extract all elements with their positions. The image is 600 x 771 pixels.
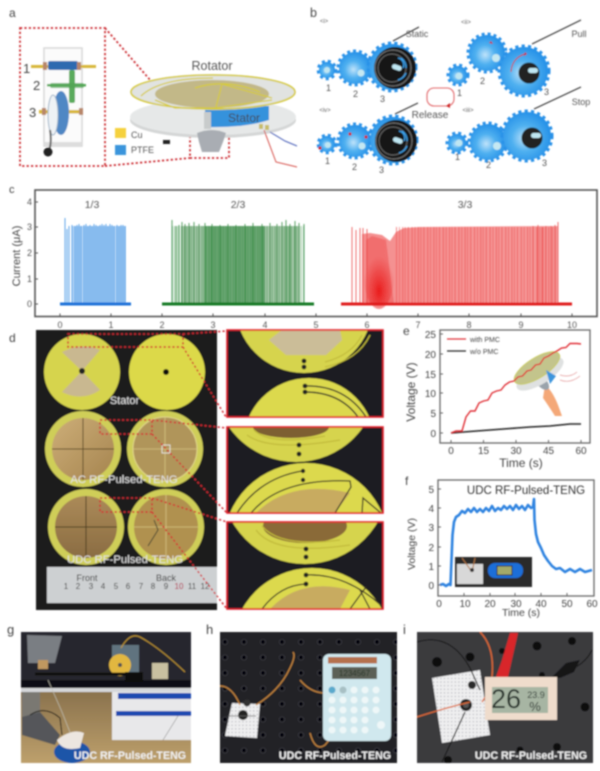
photo caption: UDC RF-Pulsed-TENG	[475, 750, 587, 762]
inset photo: hygrometer	[455, 557, 532, 587]
axes: 15	[478, 446, 489, 457]
panel h: calculator demo photo	[206, 622, 397, 763]
calculator: 1234567	[339, 669, 371, 678]
plot frame and axes	[27, 190, 597, 330]
ruler: 1	[64, 582, 69, 591]
axes: 5	[430, 409, 436, 420]
axes: 5	[428, 485, 434, 496]
axes: 3	[428, 523, 434, 534]
ruler: 3	[89, 582, 94, 591]
state i static: 3	[380, 94, 385, 104]
ruler: 4	[101, 582, 106, 591]
state iii stop: 1	[455, 152, 460, 162]
photo captions: AC RF-Pulsed-TENG	[70, 474, 178, 486]
axes	[428, 480, 598, 610]
photo	[220, 632, 397, 763]
stator discs	[44, 334, 205, 410]
photo caption: UDC RF-Pulsed-TENG	[279, 750, 391, 762]
plot frame and axes: 3	[27, 222, 32, 232]
plot frame and axes: 0	[57, 320, 63, 330]
legend: w/o PMC	[469, 349, 498, 356]
shaft 2	[47, 70, 86, 103]
axes: 2	[428, 543, 434, 554]
blue voltage trace	[440, 499, 592, 586]
plot frame and axes: 4	[262, 320, 268, 330]
state i static: 1	[326, 83, 331, 93]
ruler: 10	[175, 582, 184, 591]
axes: 40	[535, 599, 547, 610]
state iv release: 1	[325, 156, 330, 166]
axes: 30	[510, 599, 522, 610]
green trace 2/3	[162, 220, 314, 304]
gear numbers: 3	[29, 105, 36, 120]
series labels	[85, 199, 472, 211]
axes: 20	[484, 599, 496, 610]
axis titles: Time (s)	[499, 456, 543, 470]
label i: i	[403, 622, 406, 637]
hygrometer: %	[529, 699, 541, 714]
photo	[417, 632, 593, 764]
dashed zoom connectors	[68, 331, 227, 609]
state iv release: 2	[352, 162, 357, 172]
ruler: Back	[156, 573, 177, 583]
axis titles: Time (s)	[301, 331, 337, 342]
photo captions: Stator	[110, 395, 140, 407]
ruler: 11	[188, 582, 197, 591]
shaft 3 with spring	[39, 91, 83, 156]
panel d: device photographs	[8, 328, 385, 612]
plot frame and axes: 3	[210, 320, 216, 330]
gear numbers: 1	[23, 61, 30, 76]
state ii pull: 2	[480, 76, 485, 86]
inset: device with hand	[510, 346, 580, 416]
state iii stop	[447, 87, 590, 170]
hygrometer	[485, 677, 557, 720]
plot frame and axes: 9	[518, 320, 524, 330]
cycle loop arrow	[427, 88, 454, 108]
photo captions: UDC RF-Pulsed-TENG	[67, 554, 183, 566]
axes: 0	[448, 446, 454, 457]
ruler: 2	[76, 582, 81, 591]
panel a: device schematic	[9, 6, 297, 167]
gear numbers	[23, 61, 40, 120]
axes: 45	[543, 446, 554, 457]
ruler: 9	[164, 582, 169, 591]
plot frame and axes: 1	[108, 320, 114, 330]
axes: 15	[425, 370, 436, 381]
chart caption: UDC RF-Pulsed-TENG	[467, 485, 585, 497]
plot frame and axes: 2	[27, 248, 32, 258]
state iii stop: <iii>	[462, 108, 474, 114]
axes: 30	[510, 446, 522, 457]
series labels: 2/3	[231, 199, 245, 211]
ruler	[47, 567, 217, 603]
legend	[115, 128, 154, 155]
axes: 60	[575, 446, 587, 457]
photo: board with discs	[36, 330, 217, 610]
rotator label: Rotator	[192, 59, 232, 73]
panel i: hygrometer demo photo	[403, 622, 593, 764]
label a: a	[9, 6, 16, 20]
axes: 25	[425, 330, 436, 341]
state iii stop: 3	[542, 158, 547, 168]
axis titles: Time (s)	[502, 607, 540, 619]
label c: c	[9, 184, 15, 196]
wires and clips	[417, 632, 492, 717]
inset 1: stator contacts	[225, 328, 385, 419]
axes: 0	[430, 429, 436, 440]
ruler: 6	[126, 582, 131, 591]
plot frame and axes: 10	[567, 320, 577, 330]
label e: e	[403, 324, 410, 338]
axes: 10	[425, 389, 436, 400]
plot frame and axes: 0	[27, 299, 32, 309]
state ii pull: <ii>	[461, 20, 471, 26]
axes: 0	[428, 581, 434, 592]
axes: 20	[425, 350, 436, 361]
panel e: voltage charging chart	[403, 324, 590, 470]
breadboard	[432, 670, 490, 743]
connector pins	[259, 124, 263, 129]
blue trace 1/3	[60, 218, 131, 304]
AC discs	[45, 411, 203, 487]
series labels: 3/3	[458, 199, 472, 211]
wires	[220, 652, 330, 747]
panel g: hand-driven setup photo	[7, 622, 191, 763]
state i static: 2	[353, 89, 358, 99]
inset 2: AC contacts	[225, 425, 385, 515]
legend: PTFE	[131, 145, 154, 155]
state iv release: <iv>	[319, 108, 331, 114]
plot frame and axes: 2	[159, 320, 165, 330]
state i static: Static	[406, 29, 429, 39]
axes: 50	[561, 599, 573, 610]
axes: 0	[436, 599, 442, 610]
ruler: 5	[114, 582, 119, 591]
panel c: current time-series chart	[9, 184, 597, 342]
series labels: 1/3	[85, 199, 99, 211]
label h: h	[206, 622, 213, 637]
state ii pull: Pull	[571, 29, 587, 39]
axes: 4	[428, 504, 434, 515]
ruler: 12	[201, 582, 210, 591]
plot frame and axes: 8	[466, 320, 472, 330]
axes: 60	[586, 599, 598, 610]
photo	[21, 632, 191, 763]
state iv release: Release	[412, 110, 449, 121]
zoom callout dashed outline	[20, 28, 229, 166]
state iv release	[318, 103, 449, 175]
panel f: voltage response chart	[405, 474, 598, 619]
state iii stop: Stop	[572, 97, 590, 107]
panel f: voltage response chart: Voltage (V)	[406, 518, 418, 570]
plot frame and axes: 5	[313, 320, 319, 330]
panel e: voltage charging chart: Voltage (V)	[404, 362, 418, 422]
label b: b	[310, 6, 317, 20]
state i static: <i>	[320, 19, 329, 25]
legend: with PMC	[469, 337, 500, 344]
state ii pull: 1	[457, 88, 462, 98]
ruler: 8	[151, 582, 156, 591]
motor hub	[197, 130, 226, 152]
red trace 3/3	[341, 222, 572, 309]
axes: 10	[459, 599, 471, 610]
axes	[425, 330, 590, 457]
ruler: Front	[76, 573, 98, 583]
stator label: Stator	[228, 111, 260, 125]
plot frame and axes: 1	[27, 274, 32, 284]
ruler: 7	[139, 582, 144, 591]
hygrometer: 23.9	[527, 690, 545, 700]
red curve: with PMC	[451, 344, 581, 433]
label g: g	[7, 622, 14, 637]
black curve: without PMC	[451, 424, 581, 433]
hygrometer: 26	[491, 684, 521, 714]
shaft 1	[31, 61, 96, 70]
plot frame and axes: 4	[27, 197, 32, 207]
inset 3: UDC contacts	[225, 520, 385, 611]
label d: d	[9, 331, 16, 345]
state iii stop: 2	[486, 160, 491, 170]
stator disc	[130, 99, 296, 152]
panel c: current time-series chart: Current (μA)	[11, 226, 23, 286]
wires	[264, 130, 297, 167]
UDC discs	[48, 489, 204, 565]
state i static	[318, 19, 429, 104]
calculator	[323, 654, 391, 741]
gear numbers: 2	[33, 78, 40, 93]
photo captions	[67, 395, 183, 566]
rotator disc	[130, 74, 296, 110]
plot frame and axes: 6	[364, 320, 370, 330]
legend: Cu	[131, 130, 143, 140]
label f: f	[405, 474, 409, 488]
breadboard	[225, 700, 260, 738]
axes: 1	[428, 562, 434, 573]
legend	[447, 337, 500, 356]
state iv release: 3	[379, 165, 384, 175]
state ii pull	[448, 20, 587, 98]
photo caption: UDC RF-Pulsed-TENG	[74, 750, 186, 762]
plot frame and axes: 7	[415, 320, 421, 330]
panel b: gear mechanism states	[310, 6, 590, 175]
state ii pull: 3	[544, 87, 549, 97]
gear train frame	[31, 48, 96, 156]
